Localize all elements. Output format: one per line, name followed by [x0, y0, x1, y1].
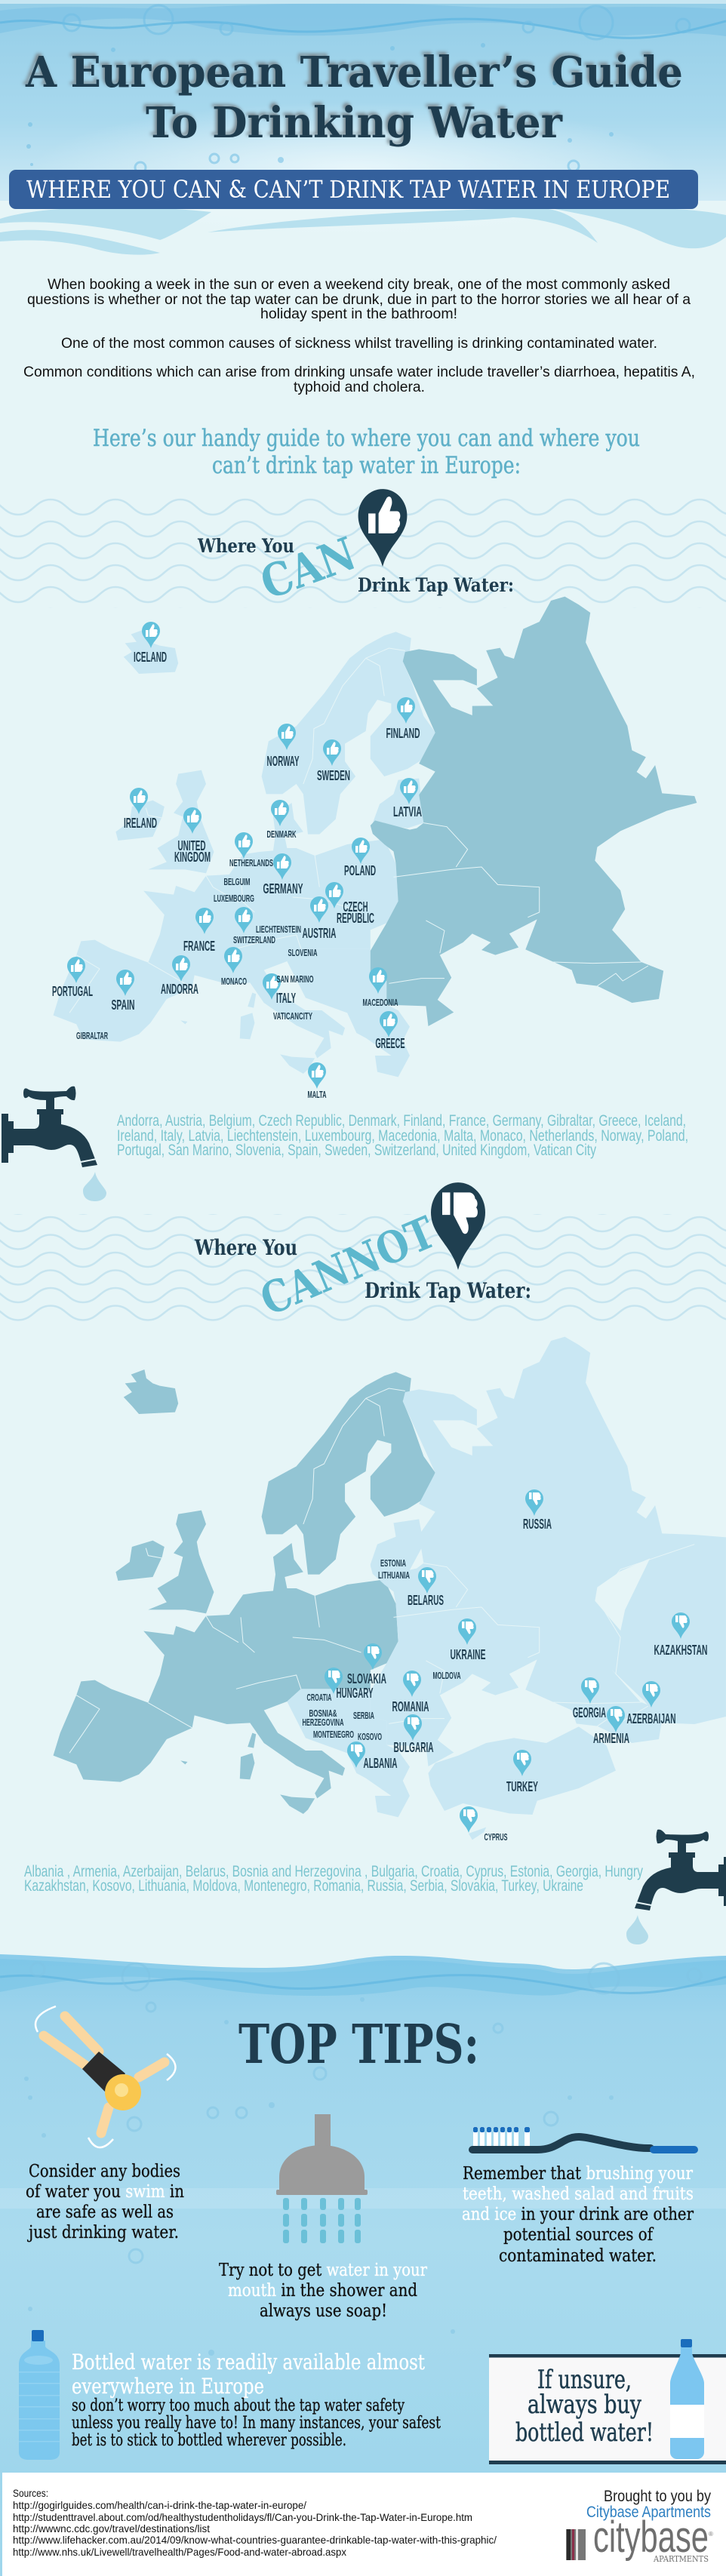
pin: Denmark [267, 800, 297, 840]
wave pattern [0, 1214, 726, 1321]
tip: bottled water: Bottled water is readily available almost [72, 2350, 426, 2375]
icon: shower [276, 2114, 368, 2243]
icon: thumbs-up location pin [358, 489, 407, 567]
pin: Andorra: ANDORRA [161, 982, 198, 997]
pin: Hungary: HUNGARY [337, 1686, 373, 1701]
pin: Slovakia: SLOVAKIA [347, 1671, 386, 1686]
pin: Poland: POLAND [344, 863, 376, 878]
tip: swimming: of water you swim in [26, 2182, 184, 2202]
pin: Austria [302, 896, 337, 941]
label: Belgium: BELGUIM [223, 876, 251, 887]
pin: Switzerland [233, 907, 275, 945]
icon: water drop [83, 1172, 106, 1201]
tip: bottled water: unless you really have to! In many instances, your safest [72, 2414, 441, 2433]
tip: shower: always use soap! [260, 2301, 387, 2321]
pin: Latvia: LATVIA [393, 804, 422, 819]
pin: Cyprus [460, 1806, 508, 1843]
icon: toothbrush [472, 2127, 694, 2150]
pin: Netherlands [229, 832, 273, 868]
pin: Ireland [124, 788, 157, 831]
title [25, 48, 683, 148]
pin: Germany: GERMANY [263, 881, 303, 896]
heading: where you cannot: Drink Tap Water: [365, 1278, 531, 1303]
label: Vatican City: VATICANCITY [273, 1010, 312, 1022]
icon: plastic bottle [19, 2330, 60, 2460]
tip: swimming: Consider any bodies [29, 2162, 180, 2181]
pin: Portugal: PORTUGAL [52, 984, 93, 999]
pin: Czech Republic: CZECH [343, 899, 368, 915]
pin: Cyprus: CYPRUS [485, 1831, 508, 1843]
pin: Andorra [161, 955, 198, 997]
pin: Macedonia: MACEDONIA [362, 997, 398, 1008]
heading: where you can [197, 527, 514, 610]
pin: Macedonia [362, 967, 398, 1008]
pin: United Kingdom [174, 807, 211, 865]
callout: if unsure: bottled water! [515, 2418, 654, 2448]
header water panel [0, 0, 726, 238]
callout: if unsure: If unsure, [537, 2365, 632, 2395]
intro text [23, 277, 695, 395]
heading: top tips: TOP TIPS: [238, 2012, 479, 2076]
pin: Greece [376, 1011, 405, 1051]
pin: Italy [263, 973, 296, 1006]
pin: Georgia: GEORGIA [573, 1705, 606, 1720]
tip: brushing: teeth, washed salad and fruits [463, 2184, 694, 2204]
pin: Slovakia [347, 1643, 386, 1686]
pin: Ireland: IRELAND [124, 816, 157, 831]
pin: Spain: SPAIN [112, 998, 134, 1013]
label: Croatia: CROATIA [306, 1692, 332, 1703]
pin: Iceland: ICELAND [134, 650, 167, 665]
pin: Malta [308, 1062, 327, 1100]
pin: Finland [386, 697, 420, 741]
tip: swimming: just drinking water. [26, 2223, 179, 2242]
icon: tap [635, 1830, 726, 1910]
sources: http://www.lifehacker.com.au/2014/09/know-what-countries-guarantee-drinkable-tap-water-with-this-graphic/ [13, 2534, 497, 2546]
pin: Iceland [134, 622, 167, 665]
callout: if unsure [489, 2339, 726, 2464]
label: Slovenia: SLOVENIA [288, 947, 318, 958]
intro text: Common conditions which can arise from drinking unsafe water include traveller’s diarrhoea, hepatitis A, [23, 364, 695, 380]
pin: United Kingdom: KINGDOM [174, 850, 211, 865]
intro text: typhoid and cholera. [294, 380, 425, 395]
banner [9, 170, 698, 209]
pin: Denmark: DENMARK [267, 828, 297, 840]
intro text: One of the most common causes of sickness whilst travelling is drinking contaminated water. [61, 336, 657, 352]
pin: Poland [344, 838, 376, 878]
intro text: questions is whether or not the tap water can be drunk, due in part to the horror stories we all hear of a [27, 292, 691, 308]
pin: Sweden: SWEDEN [317, 768, 350, 783]
tip: bottled water: so don’t worry too much about the tap water safety [72, 2396, 405, 2415]
pin: Ukraine [450, 1618, 486, 1662]
footer [2, 2473, 726, 2576]
tip: brushing [462, 2164, 694, 2266]
tip: shower: Try not to get water in your [219, 2261, 427, 2280]
tip: shower [219, 2261, 427, 2321]
label: Montenegro: MONTENEGRO [313, 1729, 354, 1740]
pin: Belarus: BELARUS [408, 1593, 444, 1608]
icon: tap [2, 1087, 97, 1167]
guide heading: can’t drink tap water in Europe: [212, 452, 521, 479]
title: To Drinking Water [146, 98, 563, 148]
pin: Switzerland: SWITZERLAND [233, 934, 275, 945]
label: Serbia: SERBIA [353, 1710, 374, 1721]
callout: if unsure: always buy [528, 2390, 642, 2420]
pin: Greece: GREECE [376, 1036, 405, 1051]
wave pattern [0, 496, 726, 608]
tip: bottled water: everywhere in Europe [72, 2374, 264, 2399]
pin: Italy: ITALY [276, 991, 296, 1006]
label: Luxembourg: LUXEMBOURG [214, 893, 254, 904]
pin: Monaco: MONACO [221, 976, 247, 987]
heading: where you cannot: CANNOT [253, 1207, 443, 1326]
tip: swimming: are safe as well as [36, 2203, 174, 2222]
heading: where you can: Where You [197, 535, 294, 557]
pin: Georgia [573, 1677, 606, 1720]
brought to you by [586, 2488, 711, 2521]
sources: http://wwwnc.cdc.gov/travel/destinations/list [13, 2522, 210, 2535]
map: can drink [52, 597, 697, 1100]
heading: where you can: CAN [254, 527, 363, 610]
pin: Russia: RUSSIA [523, 1517, 552, 1532]
pin: Bulgaria: BULGARIA [394, 1740, 433, 1755]
pin: Bulgaria [394, 1714, 433, 1755]
icon: water drop [626, 1915, 648, 1944]
sources: Sources: [13, 2487, 48, 2499]
label: San Marino: SAN MARINO [276, 973, 314, 985]
map shapes: can drink [54, 597, 697, 1077]
panel: top tips water [0, 1954, 726, 2473]
pin: Latvia [393, 778, 422, 819]
heading: where you cannot [194, 1207, 531, 1326]
title: A European Traveller’s Guide [25, 48, 683, 97]
pin: Ukraine: UKRAINE [450, 1647, 486, 1662]
pin: Austria: AUSTRIA [302, 926, 337, 941]
cannot list [24, 1863, 643, 1895]
pin: Albania: ALBANIA [364, 1756, 397, 1771]
pin: France [183, 908, 215, 954]
label: Estonia: ESTONIA [380, 1557, 406, 1569]
pin: Romania: ROMANIA [392, 1699, 429, 1714]
map: cannot drink [54, 1337, 726, 1843]
label: Gibraltar: GIBRALTAR [76, 1030, 108, 1041]
tip: shower: mouth in the shower and [228, 2281, 417, 2301]
pin: Sweden [317, 739, 350, 783]
sources: http://www.nhs.uk/Livewell/travelhealth/Pages/Food-and-water-abroad.aspx [13, 2546, 346, 2558]
pin: Hungary [325, 1668, 373, 1701]
decorative swooshes under banner [0, 207, 726, 255]
label: Bosnia and Herzegovina [302, 1708, 344, 1728]
pin: Azerbaijan: AZERBAIJAN [626, 1711, 676, 1726]
pin: Azerbaijan [626, 1681, 676, 1726]
tip: swimming [26, 2162, 184, 2242]
pin: Monaco [221, 947, 247, 987]
pin: Germany [263, 853, 303, 896]
map shapes: cannot drink [54, 1337, 726, 1840]
pin: Malta: MALTA [308, 1089, 327, 1100]
label: Bosnia and Herzegovina: HERZEGOVINA [302, 1717, 344, 1728]
pin: Czech Republic: REPUBLIC [337, 911, 374, 926]
pin: Turkey [506, 1750, 538, 1794]
pin: Russia [523, 1489, 552, 1532]
sources: http://studenttravel.about.com/od/healthystudentholidays/fl/Can-you-Drink-the-Tap-Water-in-Europe.htm [13, 2511, 472, 2523]
tip: brushing: potential sources of [503, 2225, 654, 2245]
sources: http://gogirlguides.com/health/can-i-drink-the-tap-water-in-europe/ [13, 2499, 306, 2511]
heading: where you can: Drink Tap Water: [358, 574, 514, 596]
pin: Norway [267, 724, 299, 769]
icon: thumbs-down location pin [431, 1182, 485, 1270]
tip: brushing: and ice in your drink are other [462, 2205, 694, 2224]
tip: brushing: Remember that brushing your [463, 2164, 693, 2184]
pin: Armenia: ARMENIA [593, 1731, 629, 1746]
pin: Romania [392, 1671, 429, 1714]
pin: Portugal [52, 957, 93, 999]
pin: United Kingdom: UNITED [178, 838, 205, 853]
label: Lithuania: LITHUANIA [378, 1569, 410, 1581]
brought to you by: Brought to you by [604, 2488, 711, 2505]
can list [117, 1112, 688, 1159]
pin: Finland: FINLAND [386, 726, 420, 741]
pin: Belarus [408, 1567, 444, 1608]
logo: citybase: ® [709, 2531, 713, 2538]
intro text: When booking a week in the sun or even a weekend city break, one of the most commonly asked [48, 277, 670, 293]
pin: Spain [112, 970, 134, 1013]
guide heading [93, 425, 640, 479]
sources [13, 2487, 497, 2558]
label: Bosnia and Herzegovina: BOSNIA& [309, 1708, 337, 1719]
icon: swimmer [35, 2006, 175, 2147]
icon: glass bottle [670, 2339, 704, 2459]
intro text: holiday spent in the bathroom! [260, 306, 457, 322]
pin: Netherlands: NETHERLANDS [229, 857, 273, 868]
pin: Turkey: TURKEY [506, 1779, 538, 1794]
pin: Norway: NORWAY [267, 754, 299, 769]
tip: bottled water [72, 2350, 441, 2450]
pin: France: FRANCE [183, 939, 215, 954]
logo: citybase: APARTMENTS [653, 2554, 709, 2564]
pin: Kazakhstan [654, 1612, 708, 1658]
heading: where you cannot: Where You [194, 1235, 297, 1260]
pin: Armenia [593, 1706, 629, 1746]
pin: Czech Republic [325, 882, 374, 926]
tip: bottled water: bet is to stick to bottled wherever possible. [72, 2431, 346, 2450]
label: Liechtenstein: LIECHTENSTEIN [256, 924, 301, 935]
tip: brushing: contaminated water. [499, 2246, 657, 2266]
label: Kosovo: KOSOVO [358, 1731, 382, 1742]
pin: Albania [347, 1741, 397, 1771]
label: Moldova: MOLDOVA [433, 1670, 461, 1681]
